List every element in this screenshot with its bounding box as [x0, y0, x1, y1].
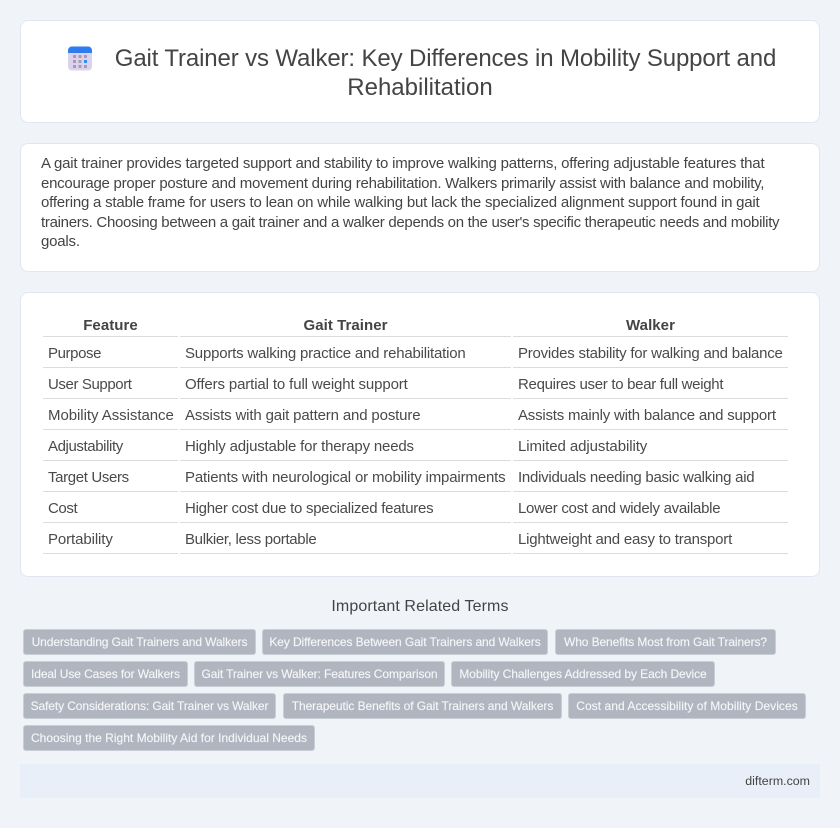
- comparison table: Supports walking practice and rehabilitation: [185, 345, 466, 362]
- comparison table: Higher cost due to specialized features: [185, 500, 433, 517]
- footer bar: [20, 764, 820, 798]
- comparison table: Provides stability for walking and balance: [518, 345, 783, 362]
- comparison table: Individuals needing basic walking aid: [518, 469, 754, 486]
- title: [115, 45, 776, 101]
- summary text: trainers. Choosing between a gait trainer and a walker depends on the user's specific therapeutic needs and mobility: [41, 214, 779, 230]
- panel: title card: [20, 20, 820, 123]
- related term tags: Key Differences Between Gait Trainers and Walkers: [269, 635, 541, 649]
- title: Rehabilitation: [347, 74, 493, 101]
- comparison table: Patients with neurological or mobility impairments: [185, 469, 505, 486]
- related term tags: Understanding Gait Trainers and Walkers: [32, 635, 247, 649]
- comparison table: Adjustability: [48, 438, 123, 455]
- comparison table: Gait Trainer: [304, 317, 387, 334]
- summary text: encourage proper posture and movement during rehabilitation. Walkers primarily assist with balance and mobility,: [41, 174, 764, 192]
- related term tags: Choosing the Right Mobility Aid for Individual Needs: [31, 731, 307, 745]
- title: Gait Trainer vs Walker: Key Differences in Mobility Support and: [115, 45, 776, 72]
- summary text: A gait trainer provides targeted support and stability to improve walking patterns, offering adjustable features that: [41, 155, 764, 172]
- comparison table: Offers partial to full weight support: [185, 376, 408, 393]
- comparison table: User Support: [48, 376, 132, 393]
- section heading: related terms: Important Related Terms: [331, 598, 509, 615]
- summary text: goals.: [41, 233, 80, 250]
- related term tags: [23, 629, 806, 751]
- comparison table: [43, 317, 788, 554]
- related term tags: Mobility Challenges Addressed by Each Device: [459, 667, 707, 681]
- comparison table: Portability: [48, 531, 113, 548]
- related term tags: Therapeutic Benefits of Gait Trainers and Walkers: [292, 699, 553, 713]
- related term tags: Ideal Use Cases for Walkers: [31, 667, 180, 681]
- comparison table: Cost: [48, 500, 77, 517]
- icon: calendar: [68, 46, 92, 70]
- panel: summary card: [20, 143, 820, 272]
- comparison table: Lower cost and widely available: [518, 500, 720, 517]
- comparison table: Assists with gait pattern and posture: [185, 407, 420, 424]
- related term tags: Gait Trainer vs Walker: Features Comparison: [202, 667, 438, 681]
- summary text: [41, 155, 780, 250]
- related term tags: Safety Considerations: Gait Trainer vs Walker: [31, 699, 268, 713]
- comparison table: Lightweight and easy to transport: [518, 531, 732, 548]
- panel: comparison table card: [20, 292, 820, 577]
- comparison table: Mobility Assistance: [48, 407, 174, 424]
- comparison table: Assists mainly with balance and support: [518, 407, 776, 424]
- comparison table: Walker: [626, 317, 675, 334]
- related term tags: Who Benefits Most from Gait Trainers?: [564, 635, 767, 649]
- footer text: difterm.com: [745, 774, 810, 788]
- comparison table: Purpose: [48, 345, 101, 362]
- comparison table: Bulkier, less portable: [185, 531, 316, 548]
- comparison table: Requires user to bear full weight: [518, 376, 723, 393]
- comparison table: Target Users: [48, 469, 129, 486]
- related term tags: Cost and Accessibility of Mobility Devices: [576, 699, 798, 713]
- summary text: offering a stable frame for users to lean on while walking but lack the specialized alignment support found in gait: [41, 194, 760, 211]
- comparison table: Limited adjustability: [518, 438, 647, 455]
- comparison table: Highly adjustable for therapy needs: [185, 438, 414, 455]
- column header: Feature: Feature: [83, 317, 138, 334]
